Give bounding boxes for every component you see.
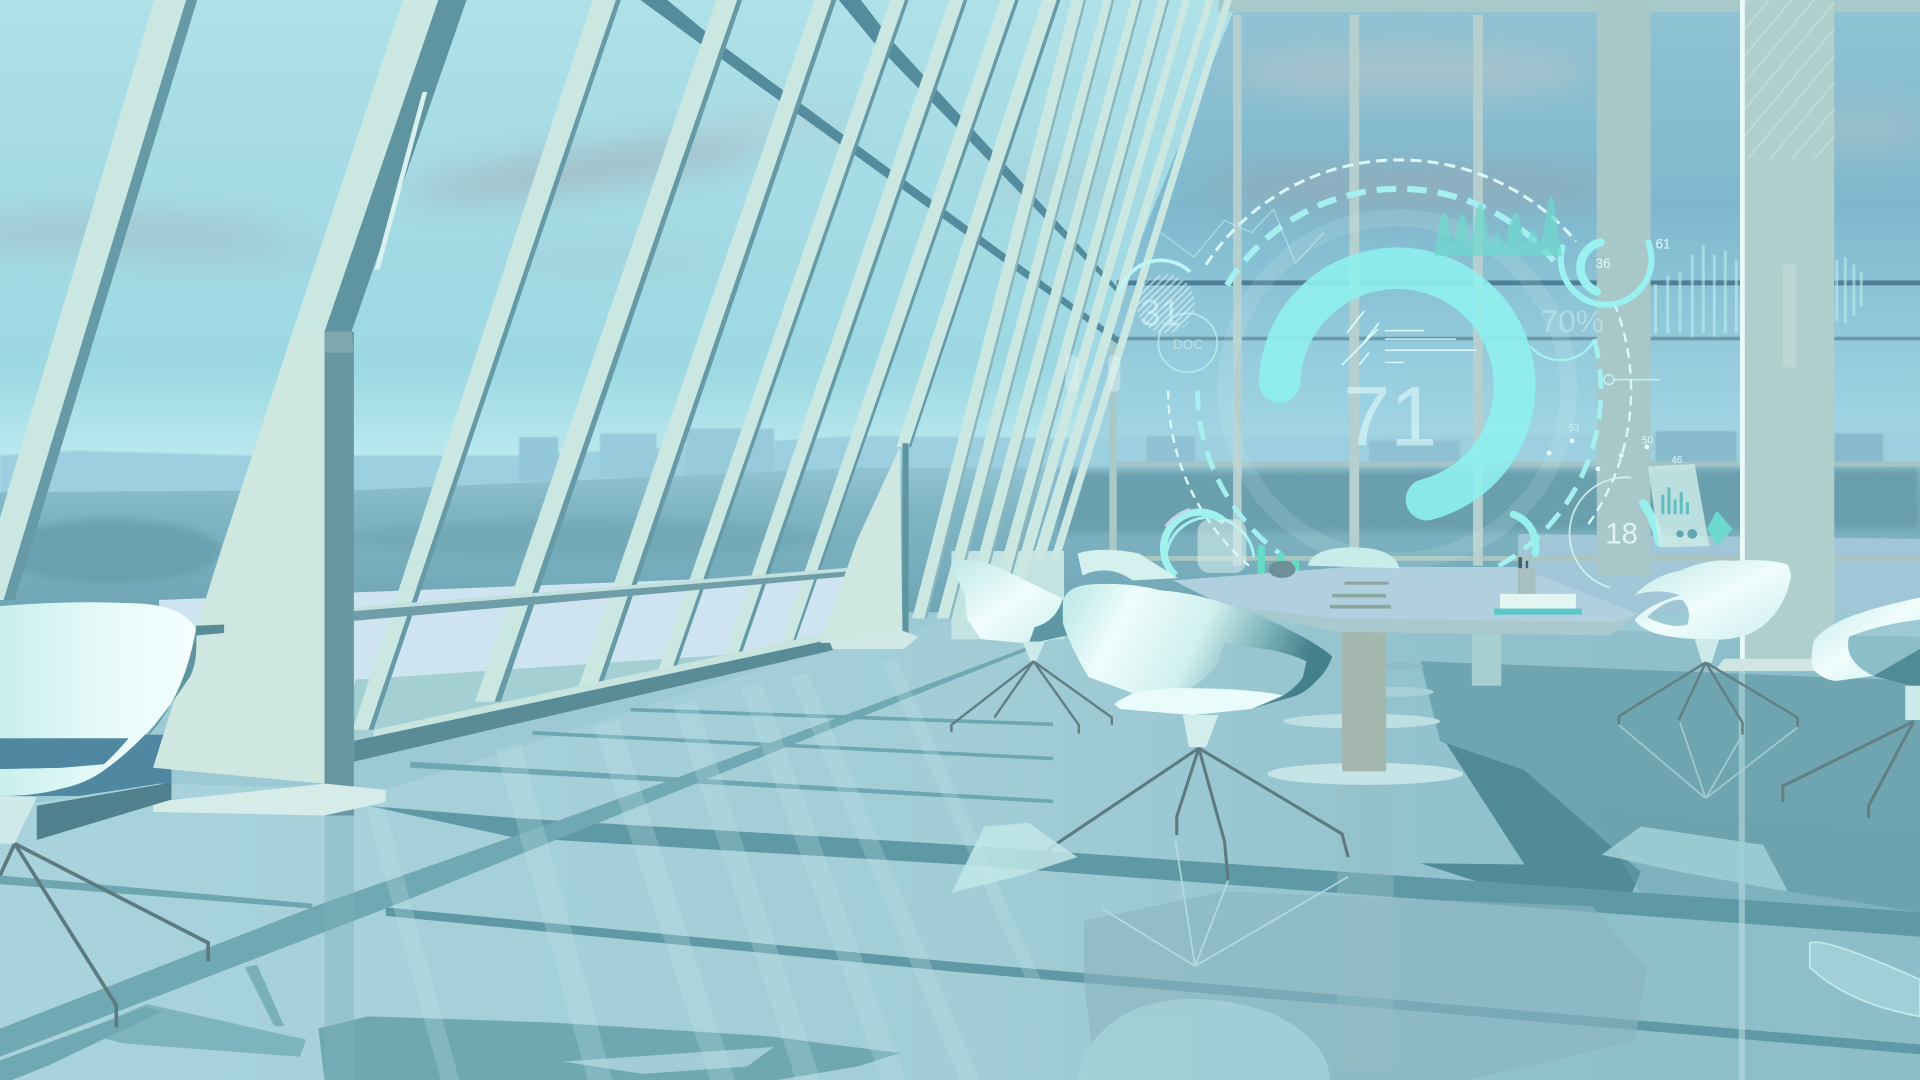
panel: left glazing diagonal mullions [0, 0, 1232, 762]
icon: ring labelled DOC [1158, 313, 1217, 372]
icon: ring labelled DOC: DOC [1173, 337, 1203, 352]
chart: small report card [1547, 423, 1733, 547]
icon: concentric rings, lower left [1164, 509, 1296, 576]
panel: conference table [1173, 547, 1638, 785]
icon: small cyan arc, lower right [1513, 514, 1536, 553]
chart: small report card: 50 [1642, 435, 1653, 446]
icon: right chair [1619, 560, 1798, 735]
chart: small ring gauge 36 and 61 [1561, 237, 1670, 305]
panel: polished floor [0, 618, 1920, 1080]
chart: small report card: 46 [1671, 455, 1683, 466]
chart: thin line graph [1161, 209, 1324, 263]
icon: rear left chair [951, 560, 1112, 733]
chart: dashed outer rings [1168, 160, 1660, 572]
chart: small ring gauge 36 and 61: 36 [1596, 256, 1610, 271]
rail across the glazing [354, 567, 857, 621]
text: 70 percent label [1531, 303, 1604, 360]
chart: main radial gauge reading 71: 71 [1343, 370, 1437, 464]
window sill [354, 632, 833, 762]
icon: hatched circle reading 31 [1119, 260, 1195, 334]
chart: main radial gauge reading 71 [1280, 268, 1515, 500]
icon: rear chair behind table [1078, 550, 1178, 580]
icon: far right chair [1783, 598, 1920, 818]
panel: distant city skyline [0, 429, 1920, 514]
panel: sky with clouds [0, 0, 1920, 514]
icon: small basket on table [1269, 561, 1296, 578]
chart: small ring gauge 36 and 61: 61 [1656, 237, 1670, 252]
chart: small report card: 53 [1569, 423, 1580, 434]
chart: circle reading 18 [1569, 477, 1659, 588]
panel: left glazing cross beams [640, 0, 1119, 345]
panel: floor shadows and light bands [0, 647, 1920, 1080]
chart: circle reading 18: 18 [1605, 518, 1638, 551]
icon: pale pills beside the window edge [1065, 355, 1120, 392]
icon: front chair [1049, 584, 1348, 880]
text: 70 percent label: 70% [1540, 303, 1604, 339]
icon: hatched circle reading 31: 31 [1140, 293, 1181, 334]
panel: chair reflections on floor [951, 722, 1920, 1080]
panel: holographic dashboard [1065, 160, 1861, 588]
icon: pen holder and book on table [1494, 557, 1582, 615]
chart: vertical bar lines, right [1656, 245, 1861, 337]
icon: large left chair [0, 602, 208, 1027]
panel: back wall glazing and columns [951, 0, 1920, 671]
panel: large structural column, left [37, 0, 918, 840]
panel: forest and river landscape [0, 465, 1920, 796]
chart: area peaks [1434, 196, 1562, 256]
